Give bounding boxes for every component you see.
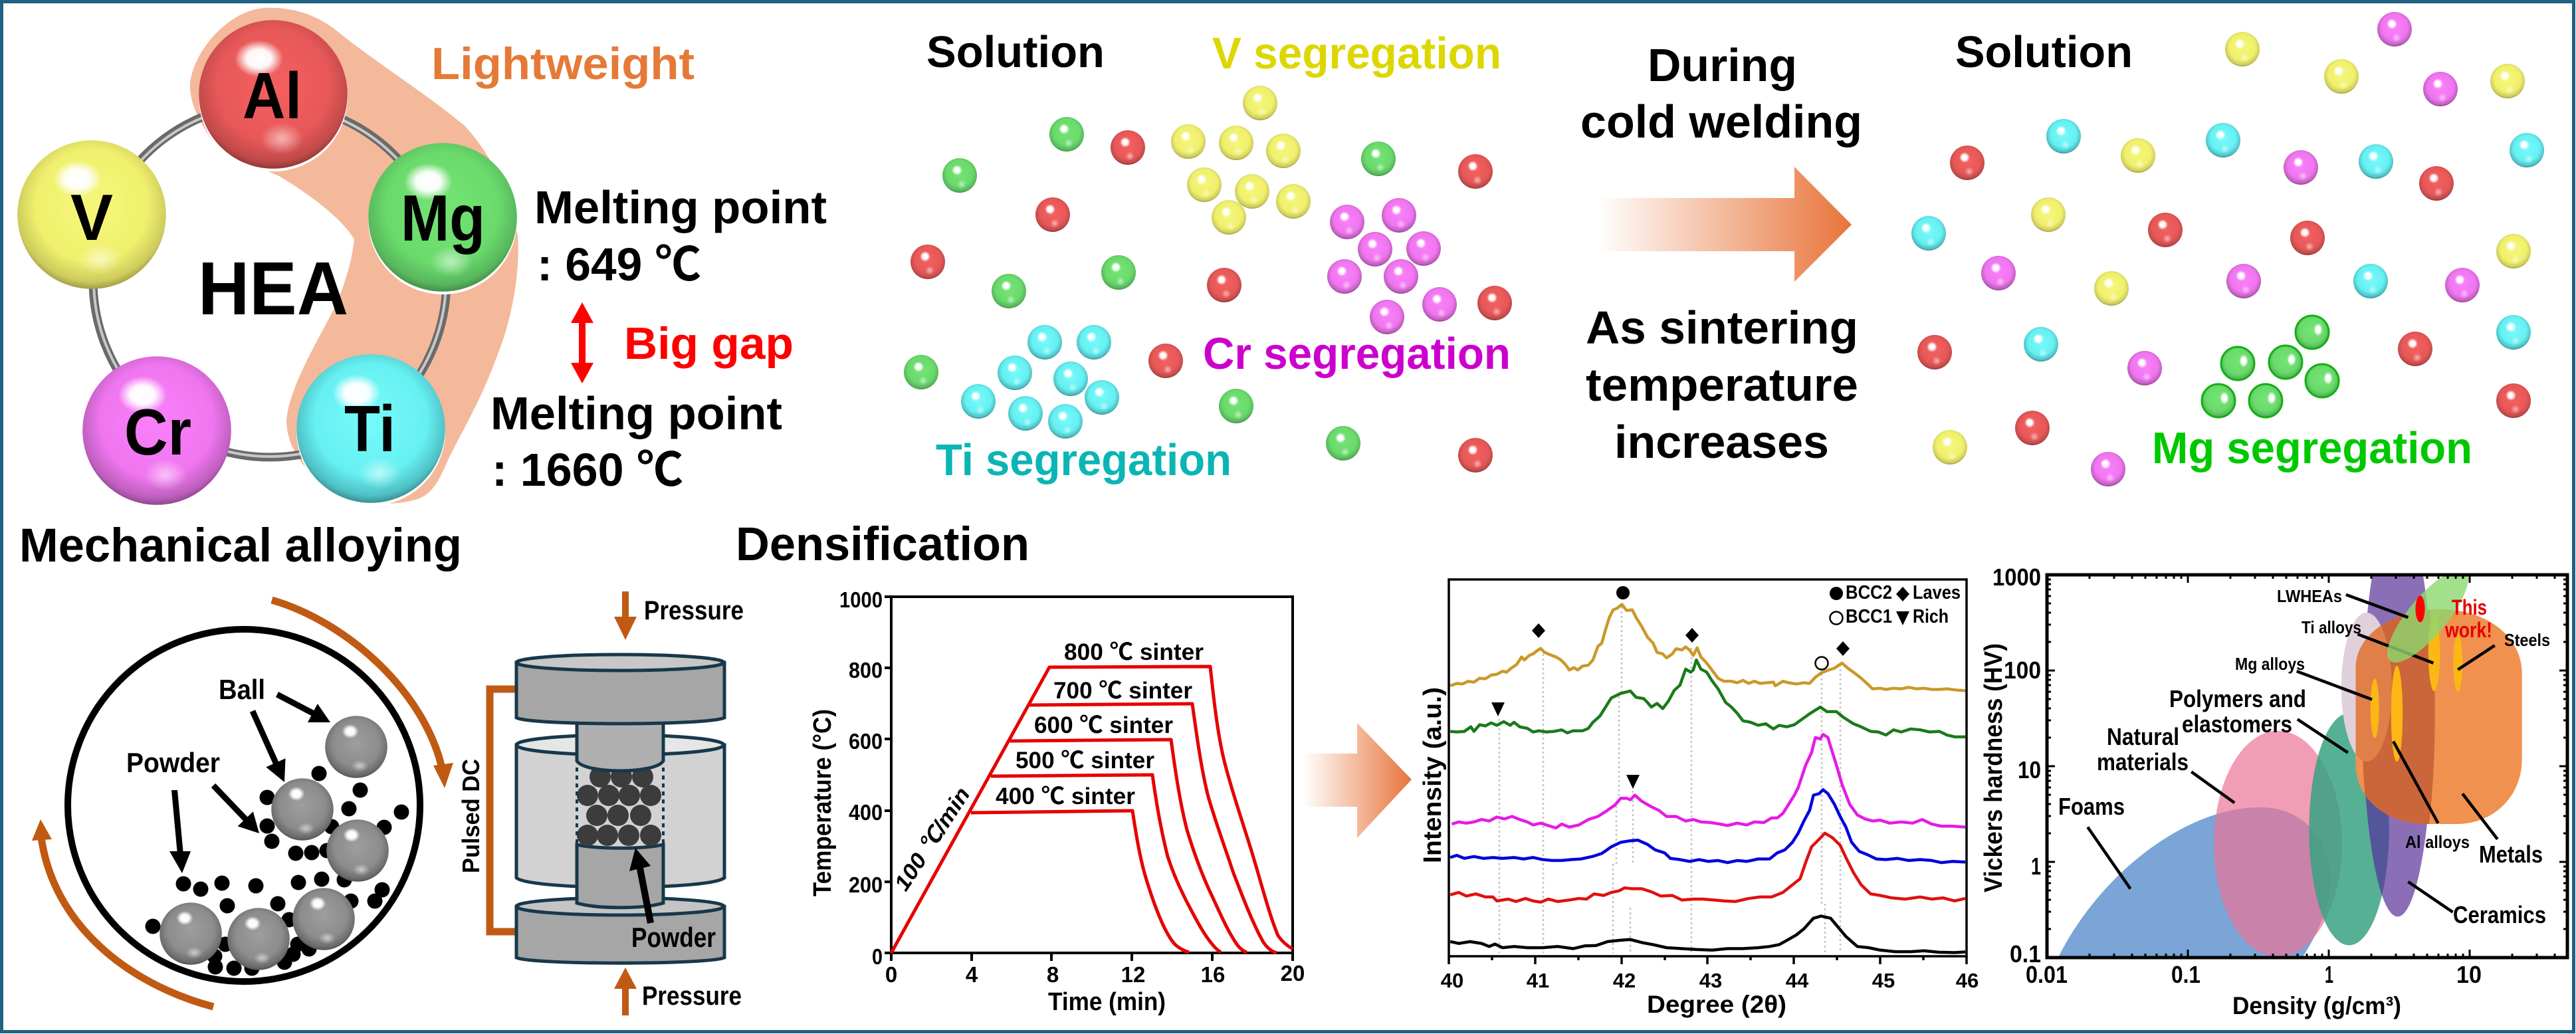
legend: BCC2: [1846, 582, 1892, 603]
x tick labels: 41: [1527, 969, 1549, 992]
element sphere: Al: [199, 20, 348, 171]
y tick labels: 1000: [839, 587, 883, 612]
Cr segregation label: Cr segregation: [1203, 329, 1511, 379]
small region labels: Ti alloys: [2302, 617, 2361, 637]
panel: spark plasma sintering die: [457, 591, 744, 1015]
large region labels: Ceramics: [2453, 901, 2546, 928]
material property regions: [2059, 577, 2522, 956]
large region labels: elastomers: [2182, 710, 2292, 738]
green atoms: [904, 117, 1396, 461]
powder particles: [145, 766, 409, 976]
x tick labels: 0: [885, 962, 897, 987]
powder pointer arrow: [629, 848, 654, 924]
element sphere: Cr: Cr: [124, 395, 191, 468]
plot frame and ticks: [2047, 575, 2576, 958]
melting point Mg: Melting point: [534, 181, 827, 233]
y axis title: Vickers hardness (HV): [1980, 643, 2008, 892]
x tick labels: 20: [1281, 961, 1305, 985]
y tick labels: 0.1: [2010, 940, 2041, 968]
During cold welding text: During: [1648, 39, 1797, 91]
Solution label: Solution: [926, 27, 1105, 77]
cyan atoms: [961, 325, 1119, 439]
x tick labels: [2026, 961, 2482, 988]
region: Ti metals overlap: [2355, 626, 2392, 762]
y tick labels: 600: [849, 729, 883, 754]
As sintering temperature increases text: As sintering: [1586, 302, 1858, 354]
Pulsed DC label: Pulsed DC: [457, 759, 484, 873]
Ball label: Ball: [219, 674, 265, 705]
x tick labels: 0.1: [2171, 961, 2200, 988]
large region labels: Metals: [2479, 841, 2543, 868]
melting point Mg: : 649 ℃: [537, 239, 701, 290]
During cold welding text: [1580, 39, 1862, 148]
Densification heading: Densification: [736, 518, 1029, 571]
x axis title: Degree (2θ): [1647, 991, 1786, 1018]
x tick labels: [1441, 969, 1979, 992]
yellow atoms: [1171, 86, 1311, 235]
x tick labels: 40: [1441, 969, 1463, 992]
melting point Ti: Melting point: [490, 387, 782, 439]
green Mg segregated atoms: [2202, 316, 2339, 417]
sintered powder: [577, 766, 661, 846]
panel: HEA element ring: [17, 8, 827, 506]
large region labels: Foams: [2058, 793, 2125, 820]
lower punch: [577, 845, 663, 908]
small region labels: Al alloys: [2405, 832, 2470, 852]
y axis title: Temperature (°C): [809, 709, 837, 896]
upper punch: [577, 721, 663, 771]
melting point Ti: [490, 387, 782, 496]
This work label: [2444, 595, 2492, 642]
x tick labels: 44: [1786, 969, 1809, 992]
curve labels: 400 ℃ sinter: [996, 783, 1135, 809]
region: Ti alloys: [2341, 613, 2381, 754]
dashed die bore: [577, 768, 663, 845]
As sintering temperature increases text: increases: [1614, 416, 1829, 468]
axes frame: [885, 597, 1293, 961]
legend: Laves: [1913, 582, 1961, 603]
y tick labels: 0: [872, 944, 883, 969]
double arrow: big gap: [571, 302, 593, 383]
x tick labels: 46: [1956, 969, 1979, 992]
curve labels: 700 ℃ sinter: [1053, 678, 1192, 704]
region: ceramics metals overlap: [2363, 609, 2435, 824]
x tick labels: 8: [1047, 962, 1059, 987]
x tick labels: 4: [966, 962, 978, 987]
lightweight highlight blob: [190, 8, 518, 504]
region: LWHEAs: [2375, 559, 2480, 673]
large region labels: Polymers and: [2169, 685, 2306, 712]
curve labels: 600 ℃ sinter: [1034, 712, 1173, 738]
Mechanical alloying heading: Mechanical alloying: [19, 520, 462, 572]
x tick labels: [885, 961, 1305, 987]
As sintering temperature increases text: temperature: [1586, 359, 1858, 411]
large region labels: materials: [2097, 748, 2189, 776]
x tick labels: 12: [1121, 962, 1145, 987]
this work marker: [2416, 595, 2425, 622]
element sphere: Ti: Ti: [344, 392, 395, 465]
Mg segregation label: Mg segregation: [2152, 423, 2472, 473]
region: ceramics: [2366, 577, 2427, 917]
legend: [1830, 582, 1961, 627]
x tick labels: 42: [1613, 969, 1636, 992]
x tick labels: 10: [2456, 961, 2482, 988]
y axis title: Intensity (a.u.): [1419, 687, 1447, 863]
x axis title: Density (g/cm³): [2232, 992, 2401, 1019]
x tick labels: 45: [1872, 969, 1895, 992]
x axis title: Time (min): [1048, 988, 1166, 1016]
yellow atoms: [1933, 32, 2531, 465]
milling balls: [160, 716, 389, 970]
die cylinder: [516, 735, 724, 887]
red atoms: [911, 130, 1512, 472]
Powder label: Powder: [631, 922, 716, 953]
small region labels: Steels: [2504, 630, 2550, 650]
element sphere: Mg: Mg: [401, 181, 485, 255]
x tick labels: 0.01: [2026, 961, 2068, 988]
Solution label: Solution: [1955, 27, 2133, 77]
rotation arrow bottom: [32, 819, 213, 1007]
alloy ellipses: [2371, 613, 2462, 762]
element sphere: V: [17, 140, 166, 289]
Powder label: Powder: [126, 747, 220, 778]
region: ceramics polymer overlap: [2366, 796, 2389, 895]
Pressure label bottom: Pressure: [642, 982, 742, 1011]
temperature curves: [891, 667, 1293, 953]
gradient arrow: [1597, 167, 1852, 282]
element sphere: Cr: [82, 356, 231, 505]
During cold welding text: cold welding: [1580, 96, 1862, 148]
y tick labels: 1: [2031, 853, 2041, 880]
y tick labels: 800: [849, 658, 883, 682]
melting point Ti: : 1660 ℃: [492, 444, 683, 496]
chart: XRD patterns: [1419, 579, 1979, 1018]
leader lines: [2088, 595, 2498, 912]
panel: solution after sintering: [1911, 12, 2544, 486]
y tick labels: 10: [2018, 756, 2041, 783]
y tick labels: 1000: [1992, 564, 2041, 591]
x tick labels: 43: [1699, 969, 1722, 992]
region: polymers and elastomers: [2309, 713, 2389, 945]
region: metals: [2355, 609, 2522, 824]
chart: hardness versus density: [1983, 569, 2569, 1019]
milling vessel: [68, 629, 420, 982]
gradient arrow to XRD: [1303, 723, 1412, 838]
Pulsed DC wire: [490, 689, 516, 932]
small region labels: LWHEAs: [2277, 586, 2342, 606]
small region labels: Mg alloys: [2235, 654, 2305, 674]
x tick labels: 16: [1201, 962, 1225, 987]
ramp rate label: 100 ℃/min: [889, 783, 975, 895]
Ti alloys leader line: [2357, 634, 2433, 663]
peak markers: [1491, 586, 1850, 789]
y tick labels: 200: [849, 873, 883, 897]
y tick labels: [839, 587, 883, 969]
panel: mechanical alloying: [19, 520, 462, 1007]
legend: BCC1: [1846, 606, 1892, 627]
element sphere: Al: Al: [243, 59, 302, 132]
cyan atoms: [1911, 119, 2544, 362]
HEA label: HEA: [198, 247, 348, 330]
red atoms: [1917, 146, 2531, 445]
element sphere: Mg: [368, 143, 517, 294]
XRD curves: [1450, 604, 1965, 952]
As sintering temperature increases text: [1586, 302, 1858, 468]
Pressure arrow top: [614, 591, 637, 640]
element sphere: V: V: [70, 181, 113, 254]
curve labels: [996, 639, 1204, 809]
legend: Rich: [1913, 606, 1949, 627]
large region labels: Natural: [2107, 723, 2179, 750]
pointer arrows: [169, 692, 330, 873]
y tick labels: 100: [2004, 657, 2041, 684]
curve labels: 500 ℃ sinter: [1016, 748, 1154, 774]
melting point Mg: [534, 181, 827, 290]
rotation arrow top: [272, 600, 453, 788]
Ti segregation label: Ti segregation: [936, 435, 1232, 485]
ring connecting elements: [93, 104, 447, 457]
y tick labels: 400: [849, 800, 883, 825]
bottom plate: [516, 898, 724, 963]
V segregation label: V segregation: [1212, 29, 1501, 78]
panel: process arrow text: [1580, 39, 1862, 468]
x tick labels: 1: [2325, 961, 2333, 988]
Lightweight label: Lightweight: [431, 39, 695, 89]
This work label: work!: [2444, 618, 2492, 642]
panel: solution before cold welding: [904, 27, 1512, 485]
small region labels: [2235, 586, 2550, 852]
y tick labels: [1992, 564, 2041, 968]
magenta atoms: [1981, 12, 2480, 486]
region: natural materials: [2214, 731, 2342, 957]
Pressure arrow bottom: [614, 968, 637, 1015]
This work label: This: [2452, 595, 2487, 619]
Pressure label top: Pressure: [644, 596, 744, 625]
axes frame: [1449, 579, 1967, 964]
curve labels: 800 ℃ sinter: [1064, 639, 1204, 665]
top plate: [516, 655, 724, 724]
region: foams: [2058, 807, 2331, 960]
element sphere: Ti: [296, 354, 445, 506]
large region labels: [2058, 685, 2546, 928]
magenta atoms: [1327, 198, 1457, 334]
dotted peak guides: [1499, 607, 1840, 953]
chart: sintering temperature profile: [809, 587, 1305, 1016]
Big gap label: Big gap: [624, 318, 794, 369]
